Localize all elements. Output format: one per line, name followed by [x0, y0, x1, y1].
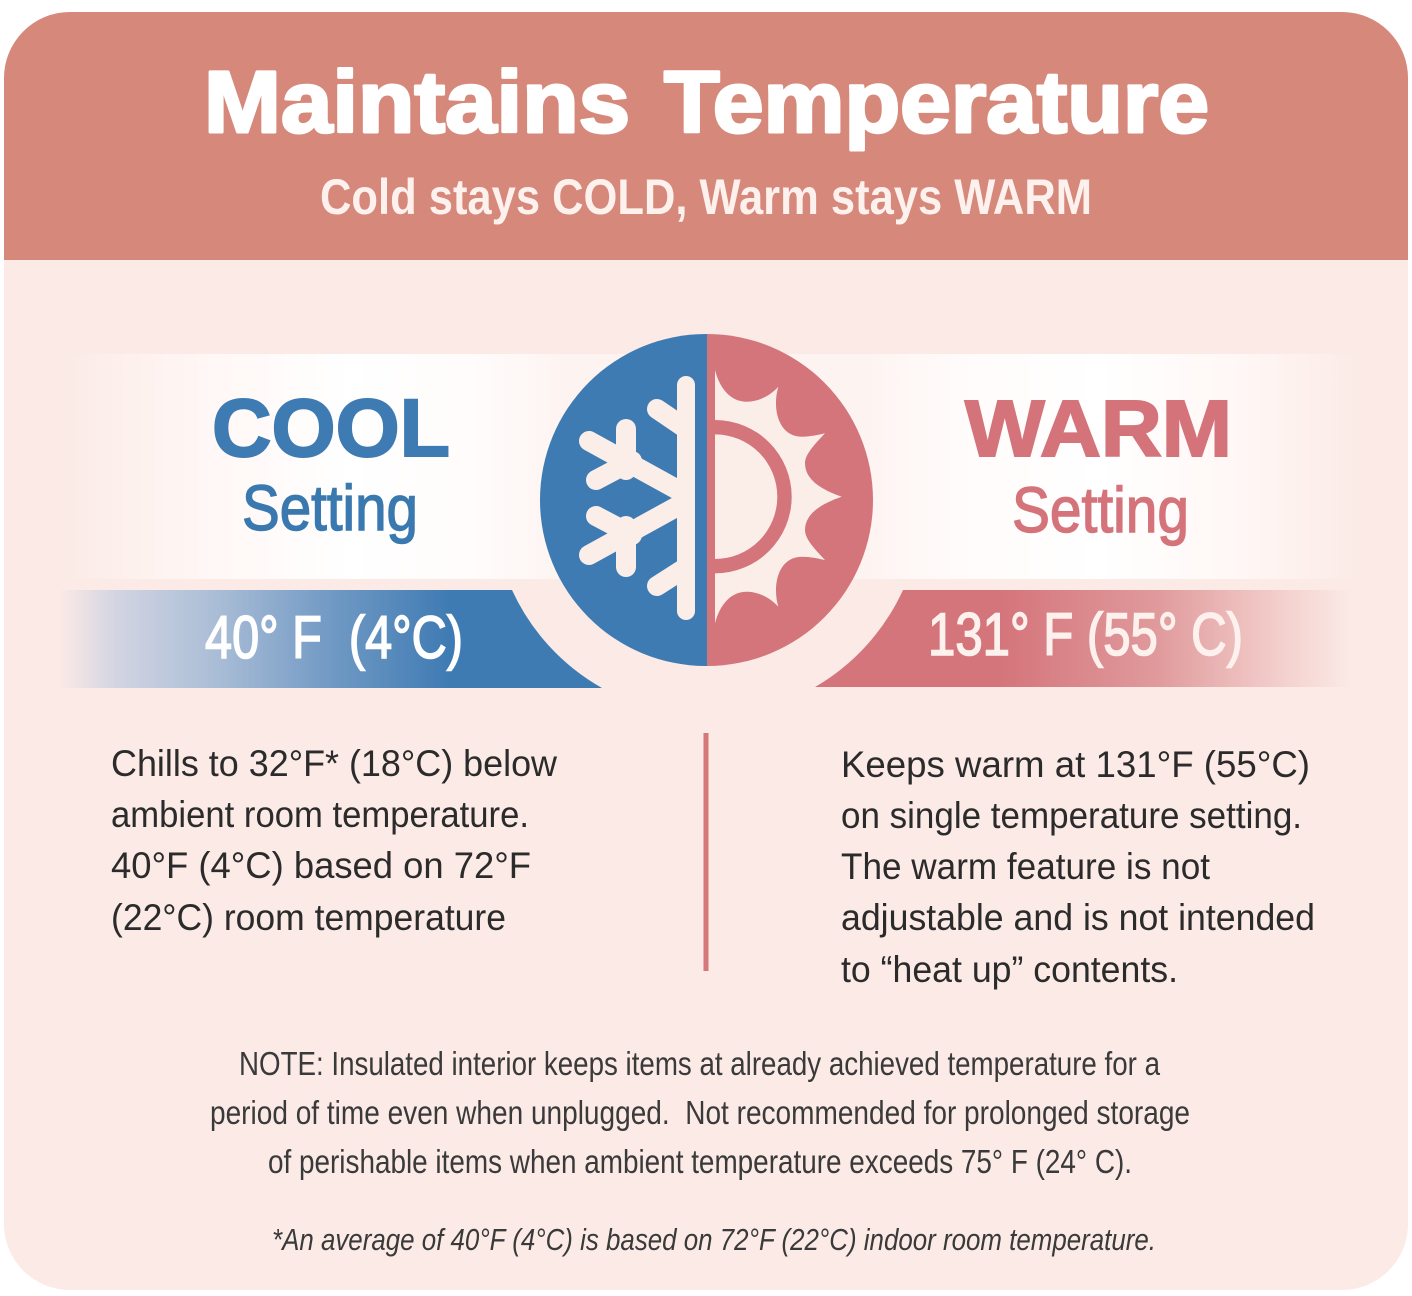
subtitle: Cold stays COLD, Warm stays WARM — [320, 169, 1092, 225]
warm temperature bar — [815, 590, 1350, 687]
icon: snowflake and sun — [540, 334, 873, 666]
icon: snowflake — [589, 385, 686, 611]
title: Maintains — [204, 54, 630, 151]
icon: sun — [715, 370, 842, 623]
footnote: *An average of 40°F (4°C) is based on 72°F (22°C) indoor room temperature. — [272, 1222, 1156, 1257]
divider — [704, 733, 708, 971]
text block: cool description: Chills to 32°F* (18°C) below — [111, 743, 557, 784]
text block: warm description: The warm feature is not — [841, 846, 1211, 887]
panel: cool setting band — [60, 354, 706, 579]
text block: warm description: to “heat up” contents. — [841, 949, 1178, 990]
cool setting label: Setting — [242, 472, 418, 544]
text block: cool description — [111, 743, 557, 938]
panel: warm setting band — [706, 354, 1362, 579]
note text: period of time even when unplugged. Not recommended for prolonged storage — [210, 1094, 1190, 1131]
cool heading: COOL — [212, 383, 450, 474]
text block: cool description: ambient room temperature. — [111, 794, 529, 835]
warm temperature value: 131° F (55° C) — [928, 601, 1243, 668]
header banner — [4, 12, 1408, 260]
note text — [210, 1045, 1190, 1180]
cool temperature bar — [60, 590, 602, 688]
text block: cool description: (22°C) room temperature — [111, 897, 506, 938]
text block: cool description: 40°F (4°C) based on 72°F — [111, 845, 531, 886]
text block: warm description — [841, 744, 1315, 990]
note text: NOTE: Insulated interior keeps items at already achieved temperature for a — [239, 1045, 1161, 1082]
text block: warm description: on single temperature setting. — [841, 795, 1302, 836]
text block: warm description: Keeps warm at 131°F (55°C) — [841, 744, 1310, 785]
title — [204, 54, 1209, 151]
cool temperature value: 40° F (4°C) — [205, 604, 463, 671]
title: Temperature — [664, 54, 1209, 151]
warm heading: WARM — [965, 384, 1232, 473]
text block: warm description: adjustable and is not intended — [841, 897, 1315, 938]
warm setting label: Setting — [1012, 474, 1189, 546]
note text: of perishable items when ambient temperature exceeds 75° F (24° C). — [268, 1143, 1132, 1180]
